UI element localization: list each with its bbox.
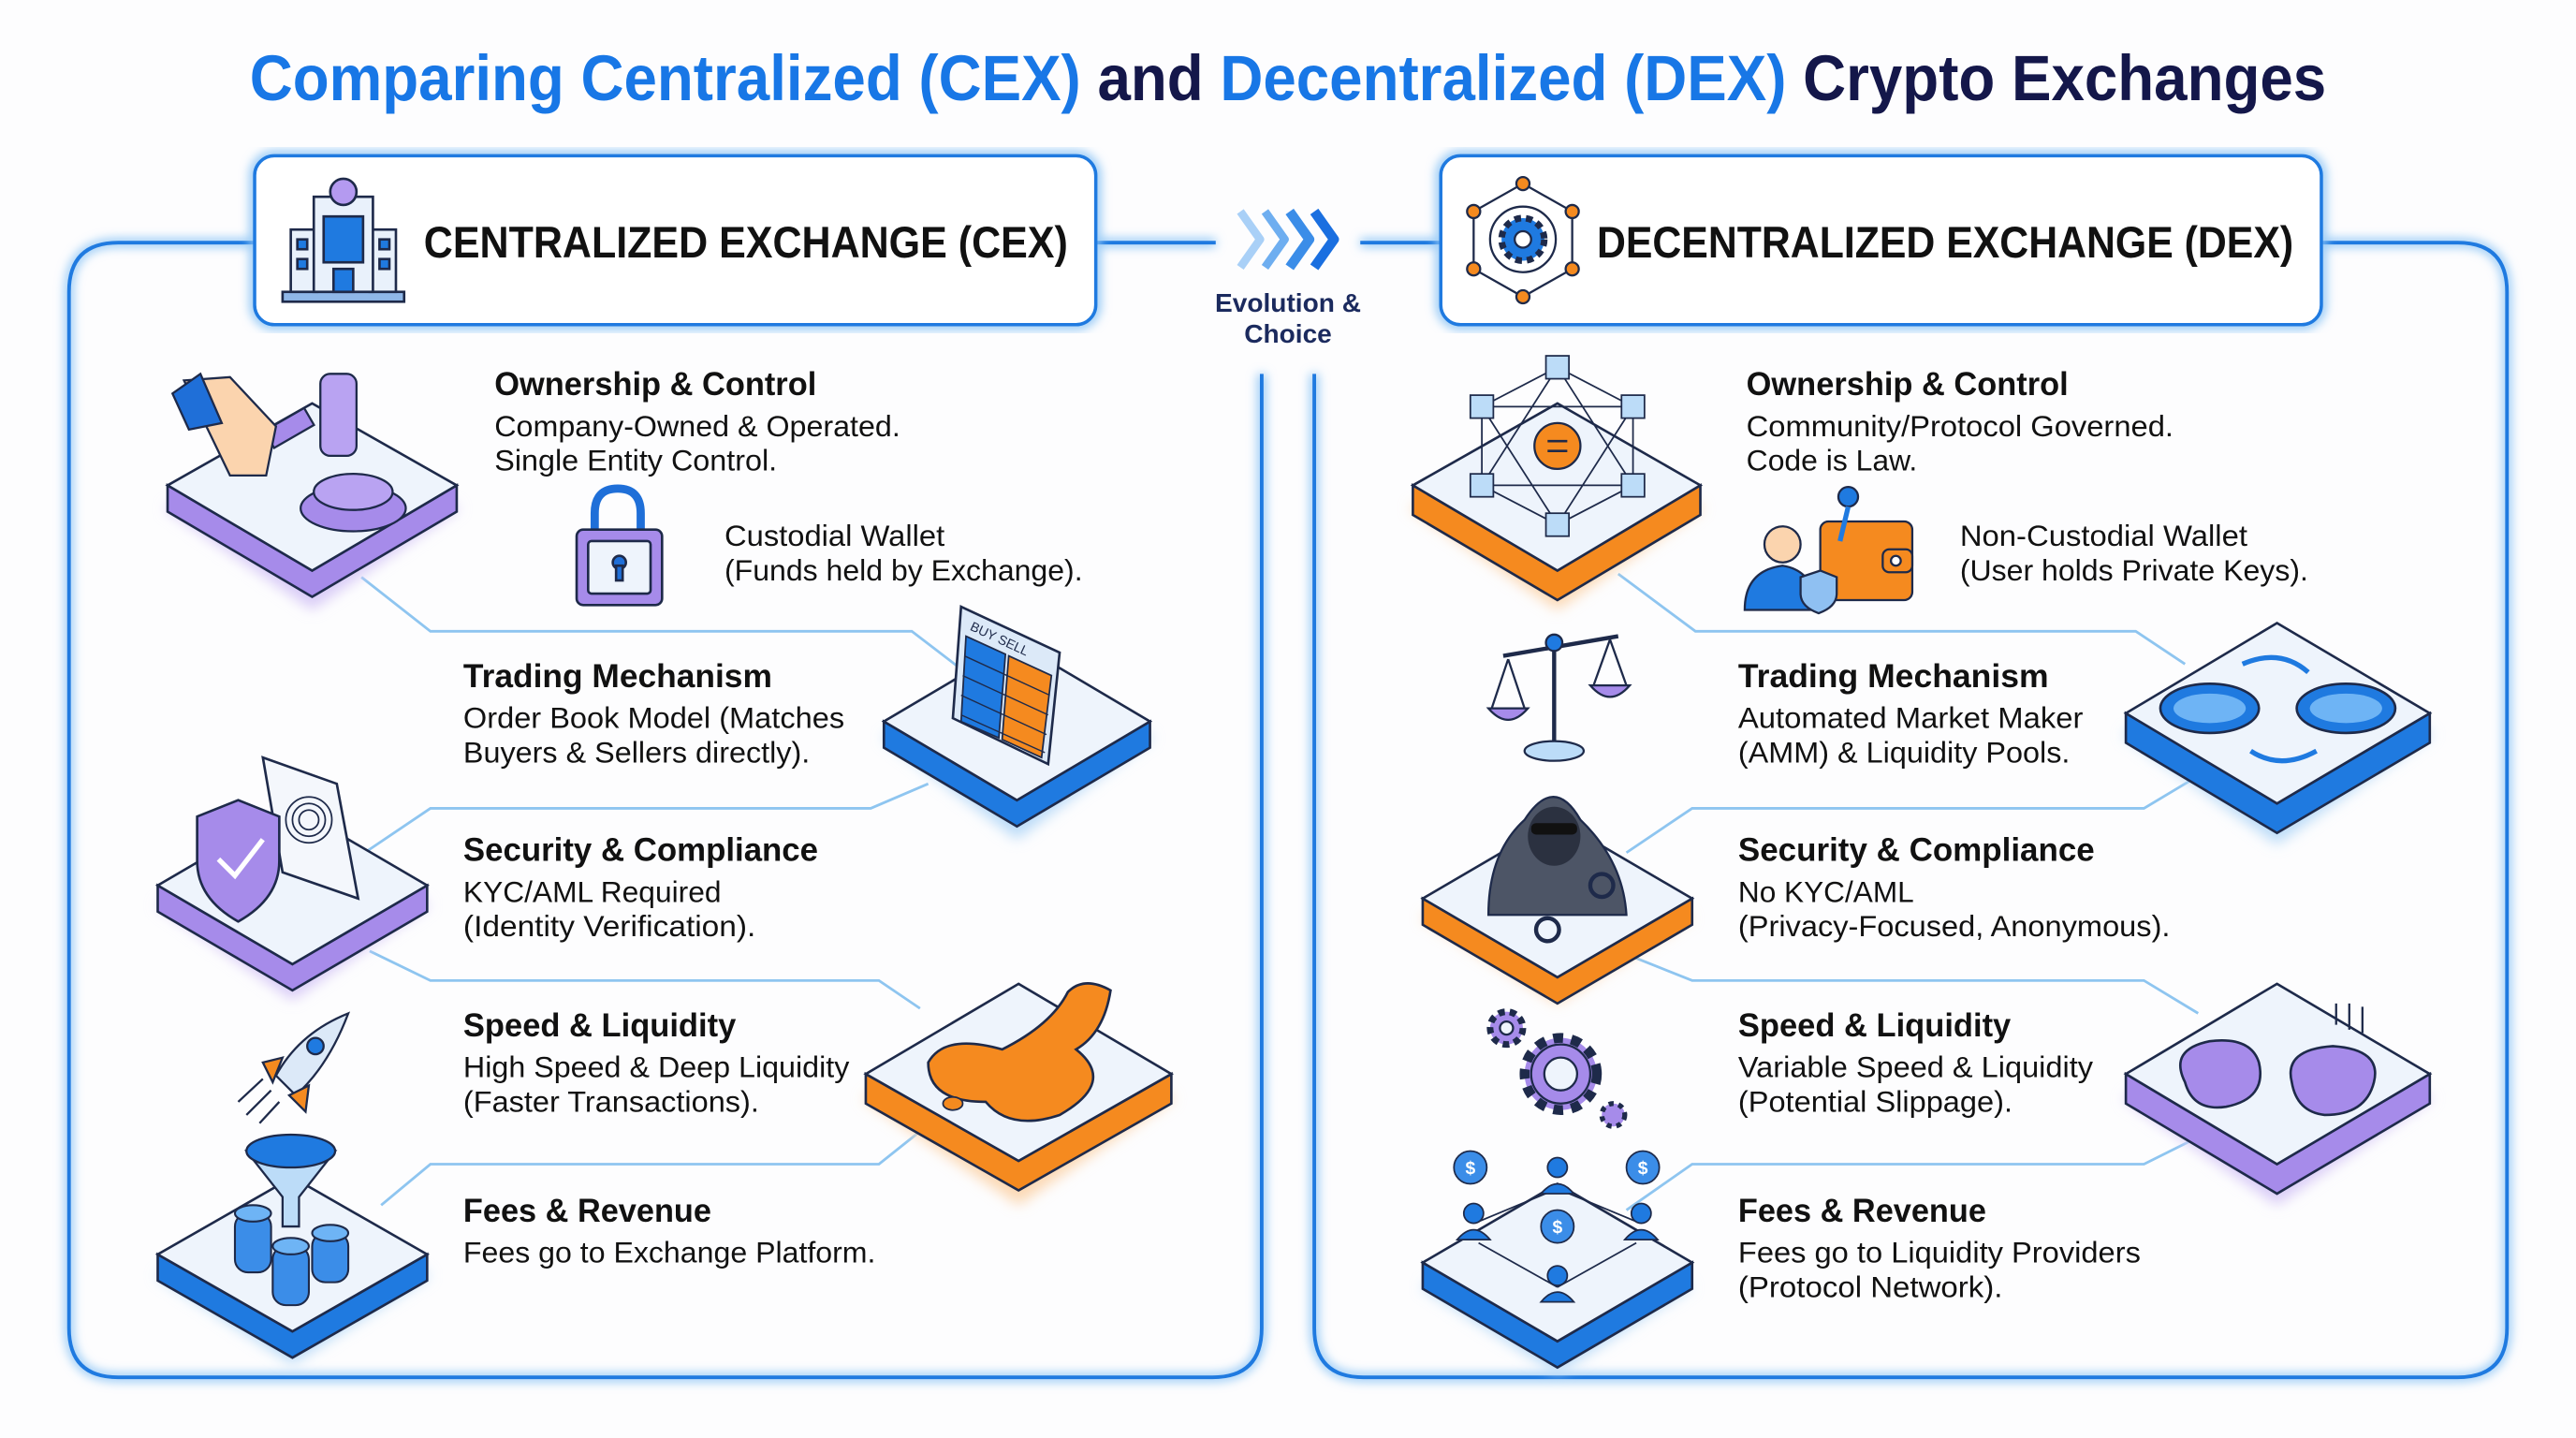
header: CEX: CENTRALIZED EXCHANGE (CEX) [424, 218, 1068, 268]
icon: p2p network platform: $ [1638, 1159, 1648, 1179]
text: trading mechanism CEX: Trading Mechanism [463, 658, 772, 695]
text: Evolution & Choice [1215, 288, 1361, 348]
text: speed CEX: (Faster Transactions). [463, 1084, 759, 1118]
icon: rocket [238, 1013, 348, 1123]
text: Evolution & Choice: Evolution & [1215, 288, 1361, 317]
text: trading mechanism CEX: Order Book Model (Matches [463, 701, 844, 735]
text: trading mechanism CEX: Buyers & Sellers directly). [463, 735, 810, 769]
text: speed CEX: High Speed & Deep Liquidity [463, 1050, 850, 1084]
text: trading mechanism CEX [463, 658, 844, 769]
text: speed CEX [463, 1007, 850, 1118]
text: security CEX: Security & Compliance [463, 832, 818, 868]
icon: bank building [283, 179, 404, 301]
text: fees CEX [463, 1193, 875, 1269]
icon: balance scales [1488, 635, 1630, 761]
text: fees DEX: Fees & Revenue [1738, 1193, 1986, 1229]
text: fees DEX: (Protocol Network). [1738, 1269, 2002, 1303]
icon: shield & fingerprint platform [156, 757, 431, 1000]
text: fees CEX: Fees go to Exchange Platform. [463, 1236, 875, 1269]
text: trading DEX: Automated Market Maker [1738, 701, 2083, 735]
text: non-custodial wallet [1960, 519, 2308, 587]
panel: left CEX frame [69, 242, 1262, 1377]
text: trading DEX: (AMM) & Liquidity Pools. [1738, 735, 2070, 769]
text: ownership DEX: Community/Protocol Governed. [1747, 409, 2174, 443]
text: trading DEX [1738, 658, 2083, 769]
icon: funnel & coins platform [156, 1135, 431, 1364]
icon: blockchain network platform [1410, 356, 1704, 610]
icon: orange pool platform [862, 983, 1175, 1205]
text: speed DEX [1738, 1007, 2093, 1118]
text: custodial wallet [724, 519, 1083, 587]
text: security DEX: (Privacy-Focused, Anonymous). [1738, 909, 2170, 943]
panel: right DEX frame [1314, 242, 2507, 1377]
icon: order book platform: BUY SELL [968, 619, 1032, 659]
text: non-custodial wallet: Non-Custodial Wallet [1960, 519, 2247, 552]
text: non-custodial wallet: (User holds Private Keys). [1960, 553, 2308, 587]
header: DEX: DECENTRALIZED EXCHANGE (DEX) [1597, 218, 2293, 268]
connector lines [361, 574, 2210, 1211]
icon: liquidity pools platform [2123, 624, 2433, 844]
text: fees CEX: Fees & Revenue [463, 1193, 711, 1229]
text: ownership & control CEX [494, 366, 900, 477]
text: speed DEX: Speed & Liquidity [1738, 1007, 2012, 1044]
text: custodial wallet: Custodial Wallet [724, 519, 944, 552]
text: custodial wallet: (Funds held by Exchange). [724, 553, 1083, 587]
text: security CEX [463, 832, 818, 943]
arrow: evolution chevrons [1240, 212, 1334, 267]
icon: purple pools platform [2123, 984, 2433, 1205]
text: speed CEX: Speed & Liquidity [463, 1007, 737, 1044]
text: speed DEX: (Potential Slippage). [1738, 1084, 2012, 1118]
text: ownership DEX: Ownership & Control [1747, 366, 2069, 403]
text: ownership DEX [1747, 366, 2174, 477]
text: security CEX: KYC/AML Required [463, 874, 721, 908]
text: security DEX: No KYC/AML [1738, 874, 1914, 908]
icon: user & wallet [1745, 487, 1912, 613]
text: fees DEX [1738, 1193, 2141, 1303]
icon: order book platform [882, 607, 1153, 840]
icon: network gear [1467, 177, 1579, 303]
header: CEX [255, 155, 1096, 325]
header: DEX [1441, 155, 2321, 325]
text: security CEX: (Identity Verification). [463, 909, 755, 943]
text: trading DEX: Trading Mechanism [1738, 658, 2049, 695]
icon: gears [1490, 1012, 1625, 1126]
icon: p2p network platform [1421, 1152, 1692, 1374]
icon: p2p network platform: $ [1552, 1218, 1562, 1238]
text: ownership & control CEX: Company-Owned & Operated. [494, 409, 900, 443]
icon: p2p network platform: $ [1465, 1159, 1475, 1179]
text: ownership DEX: Code is Law. [1747, 444, 1917, 477]
text: fees DEX: Fees go to Liquidity Providers [1738, 1236, 2141, 1269]
text: security DEX: Security & Compliance [1738, 832, 2095, 868]
icon: hacker platform [1421, 797, 1692, 1004]
icon: gavel platform [165, 374, 460, 610]
text: security DEX [1738, 832, 2170, 943]
icon: padlock [577, 489, 662, 605]
title: Comparing Centralized (CEX) and Decentralized (DEX) Crypto Exchanges [250, 43, 2326, 114]
text: ownership & control CEX: Ownership & Control [494, 366, 816, 403]
text: Evolution & Choice: Choice [1244, 319, 1332, 348]
text: ownership & control CEX: Single Entity Control. [494, 444, 777, 477]
text: speed DEX: Variable Speed & Liquidity [1738, 1050, 2093, 1084]
